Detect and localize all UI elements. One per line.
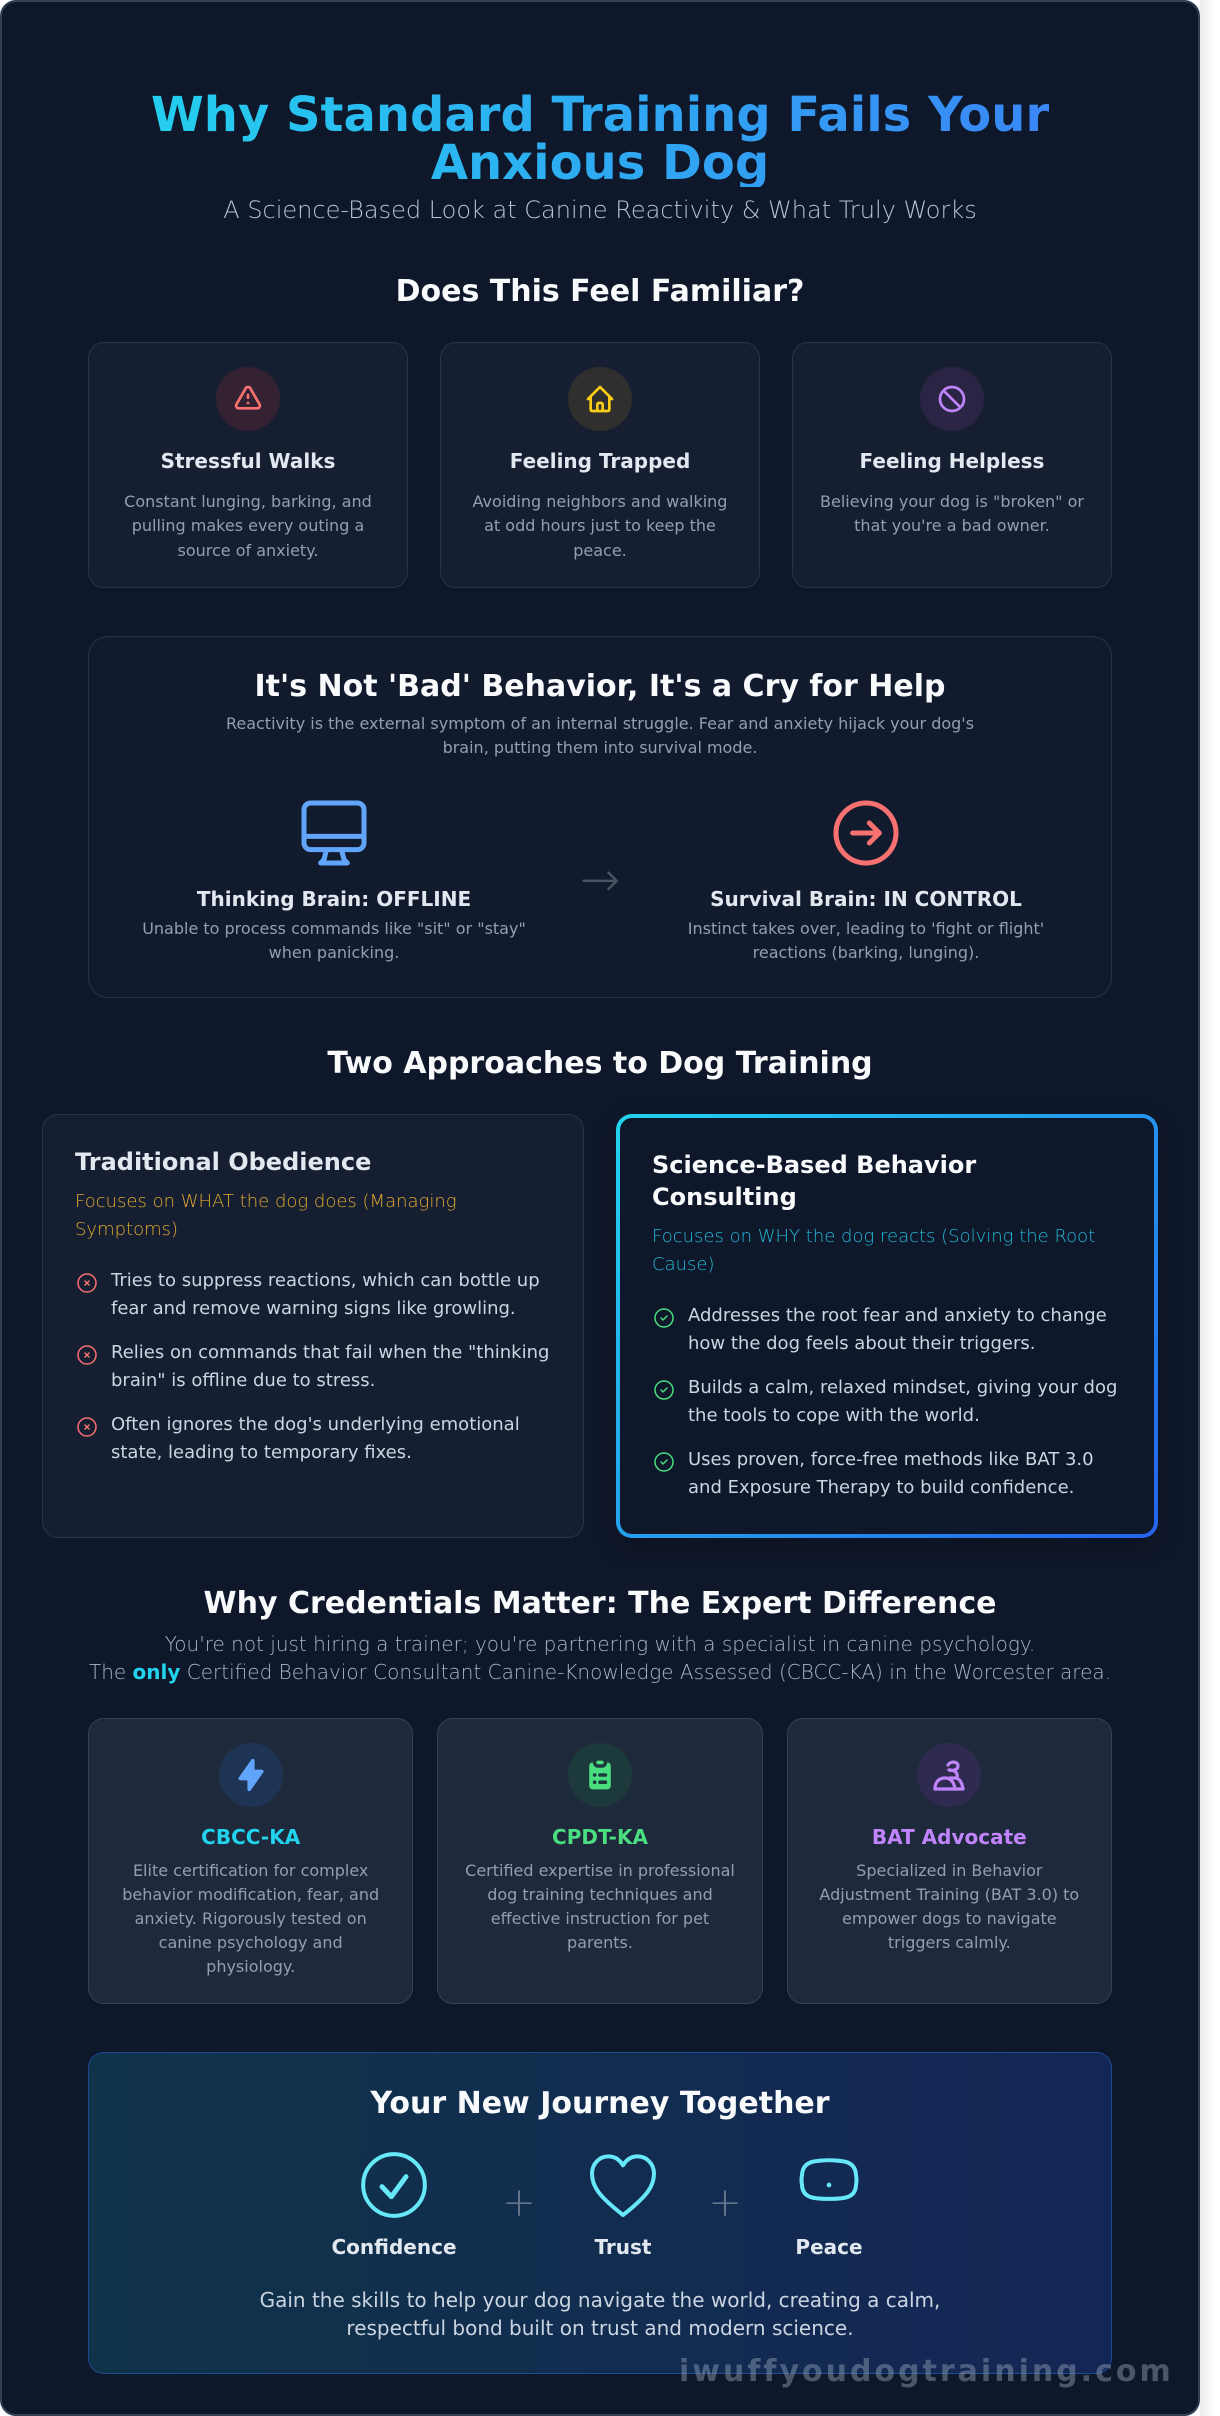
panel title: Consulting [652, 1183, 797, 1211]
item text: and Exposure Therapy to build confidence. [688, 1477, 1074, 1498]
panel: BAT advocate [787, 1718, 1112, 2004]
icon: circled arrow [834, 800, 898, 866]
journey text: respectful bond built on trust and modern science. [346, 2316, 854, 2340]
item text: Often ignores the dog's underlying emotional [111, 1414, 520, 1435]
item text [688, 1305, 1107, 1354]
survival brain title: Survival Brain: IN CONTROL [710, 887, 1022, 911]
item 3 [77, 1414, 520, 1463]
subtitle: A Science-Based Look at Canine Reactivity & What Truly Works [223, 196, 977, 224]
item text: Tries to suppress reactions, which can bottle up [111, 1270, 540, 1291]
icon: lightning bolt [219, 1743, 283, 1807]
icon: x circle [77, 1417, 97, 1437]
label: confidence: Confidence [331, 2235, 457, 2259]
credential text: Adjustment Training (BAT 3.0) to [819, 1885, 1079, 1904]
credential text: Elite certification for complex [133, 1861, 368, 1880]
icon: clipboard [568, 1743, 632, 1807]
thinking brain text [142, 919, 526, 962]
credentials intro: The only Certified Behavior Consultant Canine-Knowledge Assessed (CBCC-KA) in the Worcester area. [89, 1660, 1111, 1684]
thinking brain text: when panicking. [269, 943, 399, 962]
thinking brain text: Unable to process commands like "sit" or "stay" [142, 919, 526, 938]
panel: traditional obedience [42, 1114, 584, 1538]
panel: cry for help [88, 636, 1112, 998]
item text [688, 1449, 1094, 1498]
credential text: behavior modification, fear, and [122, 1885, 379, 1904]
credential text: anxiety. Rigorously tested on [135, 1909, 367, 1928]
credential text: Certified expertise in professional [465, 1861, 735, 1880]
heading: two approaches: Two Approaches to Dog Training [327, 1046, 873, 1081]
watermark: iwuffyoudogtraining.com [679, 2354, 1174, 2389]
title [88, 91, 1112, 187]
intro text [226, 714, 974, 757]
icon: monitor [302, 800, 366, 866]
journey text: Gain the skills to help your dog navigate the world, creating a calm, [260, 2288, 940, 2312]
title: Anxious Dog [431, 135, 769, 191]
item text: state, leading to temporary fixes. [111, 1442, 412, 1463]
credential text [819, 1861, 1079, 1952]
panel title [652, 1151, 976, 1211]
item text [111, 1342, 549, 1391]
icon: x circle [77, 1345, 97, 1365]
heading: does this feel familiar: Does This Feel Familiar? [396, 274, 804, 309]
icon: heart [590, 2154, 656, 2217]
item 1 [77, 1270, 540, 1319]
title: Why Standard Training Fails Your [151, 87, 1049, 143]
credentials intro: You're not just hiring a trainer; you're partnering with a specialist in canine psychology. [165, 1632, 1035, 1656]
card title: Feeling Helpless [860, 449, 1044, 473]
panel subtitle: Focuses on WHY the dog reacts (Solving the Root [652, 1226, 1095, 1247]
item 3 [654, 1449, 1094, 1498]
item 2 [77, 1342, 549, 1391]
credential name: CBCC-KA [201, 1825, 300, 1849]
credential text [122, 1861, 379, 1976]
card text: that you're a bad owner. [854, 516, 1050, 535]
card text [472, 492, 727, 560]
thinking brain title: Thinking Brain: OFFLINE [197, 887, 471, 911]
item text [110, 1270, 540, 1319]
item 1 [654, 1305, 1107, 1354]
credential text: empower dogs to navigate [842, 1909, 1057, 1928]
label: peace: Peace [795, 2235, 863, 2259]
panel subtitle [75, 1191, 457, 1240]
panel subtitle: Symptoms) [75, 1219, 178, 1240]
item text [111, 1414, 520, 1463]
icon: confidence check [361, 2152, 427, 2218]
icon: check circle [654, 1308, 674, 1328]
credential text: effective instruction for pet [491, 1909, 709, 1928]
item text: Uses proven, force-free methods like BAT 3.0 [688, 1449, 1094, 1470]
icon: peace [800, 2158, 858, 2201]
panel: your new journey [88, 2052, 1112, 2374]
page shadow [1200, 0, 1220, 2416]
intro text: brain, putting them into survival mode. [443, 738, 757, 757]
heading: Your New Journey Together [370, 2086, 830, 2121]
credential name: CPDT-KA [552, 1825, 648, 1849]
panel: feeling helpless [792, 342, 1112, 588]
plus sign: + [708, 2180, 742, 2226]
plus sign: + [502, 2180, 536, 2226]
item text: brain" is offline due to stress. [111, 1370, 375, 1391]
item text: how the dog feels about their triggers. [688, 1333, 1036, 1354]
panel: science-based consulting [616, 1114, 1158, 1538]
icon: house [568, 367, 632, 431]
panel: CPDT-KA [437, 1718, 763, 2004]
icon: x circle [77, 1273, 97, 1293]
survival brain text [688, 919, 1044, 962]
journey text [260, 2288, 940, 2340]
card text: source of anxiety. [178, 541, 318, 560]
icon: check circle [654, 1380, 674, 1400]
credential name: BAT Advocate [872, 1825, 1027, 1849]
panel title: Science-Based Behavior [652, 1151, 976, 1179]
card text: peace. [573, 541, 627, 560]
card text [820, 492, 1084, 535]
icon: check circle [654, 1452, 674, 1472]
intro text: Reactivity is the external symptom of an internal struggle. Fear and anxiety hijack your dog's [226, 714, 974, 733]
panel: stressful walks [88, 342, 408, 588]
card text: Avoiding neighbors and walking [473, 492, 727, 511]
heading: why credentials matter: Why Credentials Matter: The Expert Difference [204, 1586, 996, 1621]
survival brain text: reactions (barking, lunging). [753, 943, 979, 962]
item text: the tools to cope with the world. [688, 1405, 980, 1426]
card text: at odd hours just to keep the [484, 516, 716, 535]
panel subtitle: Cause) [652, 1254, 714, 1275]
card text: Believing your dog is "broken" or [820, 492, 1084, 511]
item text: Addresses the root fear and anxiety to change [688, 1305, 1107, 1326]
arrow between brains: → [580, 852, 620, 908]
credential text [465, 1861, 735, 1952]
label: trust: Trust [594, 2235, 652, 2259]
icon: warning triangle [216, 367, 280, 431]
card title: Stressful Walks [161, 449, 335, 473]
credential text: physiology. [206, 1957, 295, 1976]
credential text: dog training techniques and [487, 1885, 713, 1904]
card title: Feeling Trapped [510, 449, 690, 473]
panel subtitle [652, 1226, 1095, 1275]
item text: fear and remove warning signs like growling. [111, 1298, 516, 1319]
card text: pulling makes every outing a [132, 516, 364, 535]
credentials intro [89, 1632, 1111, 1684]
item text: Builds a calm, relaxed mindset, giving your dog [688, 1377, 1117, 1398]
panel: CBCC-KA [88, 1718, 413, 2004]
item 2 [654, 1377, 1117, 1426]
credential text: parents. [567, 1933, 633, 1952]
panel title: Traditional Obedience [75, 1148, 371, 1176]
card text [124, 492, 372, 560]
panel: feeling trapped [440, 342, 760, 588]
item text [688, 1377, 1117, 1426]
credential text: canine psychology and [159, 1933, 343, 1952]
credential text: triggers calmly. [888, 1933, 1011, 1952]
survival brain text: Instinct takes over, leading to 'fight or flight' [688, 919, 1044, 938]
card text: Constant lunging, barking, and [124, 492, 372, 511]
panel subtitle: Focuses on WHAT the dog does (Managing [75, 1191, 457, 1212]
heading: It's Not 'Bad' Behavior, It's a Cry for Help [254, 669, 945, 704]
credential text: Specialized in Behavior [856, 1861, 1042, 1880]
icon: ban sign [920, 367, 984, 431]
icon: dog shape [917, 1743, 981, 1807]
item text: Relies on commands that fail when the "thinking [111, 1342, 549, 1363]
